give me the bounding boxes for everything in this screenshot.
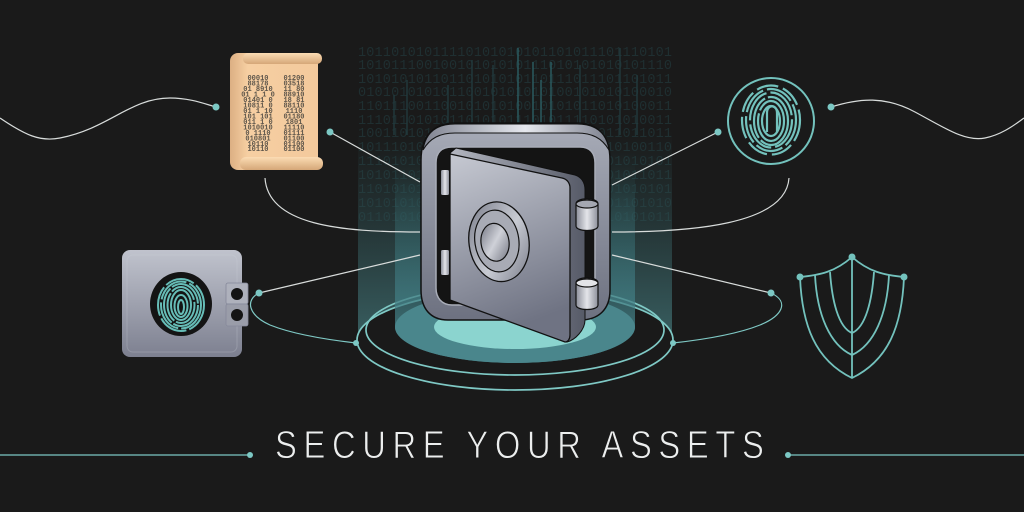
binary code backdrop: 01010101010110010101010100101010100010 xyxy=(358,86,672,101)
binary columns: 00010 xyxy=(247,75,269,83)
light beam xyxy=(358,130,672,345)
door side xyxy=(450,148,585,342)
hinge block xyxy=(226,283,248,304)
title rule right xyxy=(785,452,1024,458)
binary columns: 010801 xyxy=(245,136,271,144)
binary columns: 01100 xyxy=(283,141,305,149)
safe body xyxy=(421,123,610,320)
icon: fingerprint badge xyxy=(728,78,814,164)
bottom roll xyxy=(240,157,323,170)
binary columns: 1110 xyxy=(286,108,302,116)
binary code backdrop: 10101010110110101010110111011101101011 xyxy=(358,73,672,88)
box body xyxy=(122,250,242,357)
binary columns: 11 80 xyxy=(283,86,305,94)
binary code backdrop: 10101010101101010101010101010101101010 xyxy=(358,197,672,212)
binary code backdrop: 11101101010110101011101011110101010011 xyxy=(358,114,672,129)
binary code backdrop: 11011100110010101010010101011010100011 xyxy=(358,100,672,115)
icon: scroll with binary text xyxy=(230,53,323,170)
top roll xyxy=(243,53,322,64)
binary columns: 01180 xyxy=(283,114,305,122)
binary code backdrop xyxy=(358,46,672,226)
binary columns: 01200 xyxy=(283,75,305,83)
binary columns: 1010010 xyxy=(243,124,273,132)
binary columns: 03518 xyxy=(283,80,305,88)
binary columns: 01 8910 xyxy=(243,86,273,94)
binary columns: 0 1110 xyxy=(245,130,271,138)
dial xyxy=(464,198,534,286)
platform disc xyxy=(395,170,635,363)
connector nodes xyxy=(212,104,834,346)
binary columns: 10811 0 xyxy=(243,102,273,110)
left latches xyxy=(441,170,449,275)
connector lines xyxy=(0,98,1024,293)
binary code backdrop: 10101101010101010101010101010101011011 xyxy=(358,169,672,184)
binary columns: 01111 xyxy=(283,130,305,138)
binary code backdrop: 10101110010010101010111010101010101110 xyxy=(358,59,672,74)
title rule left xyxy=(0,452,253,458)
binary columns: 18 81 xyxy=(283,97,305,105)
binary columns: 10110 xyxy=(247,141,269,149)
binary columns: 88178 xyxy=(247,80,269,88)
vertical data streaks xyxy=(394,48,637,135)
right hinges xyxy=(576,199,598,310)
orbit connectors xyxy=(250,293,782,343)
binary code backdrop: 10011010101010101010101010101011011011 xyxy=(358,127,672,142)
binary columns: 01100 xyxy=(283,136,305,144)
binary columns: 101 101 xyxy=(243,114,273,122)
icon: open vault safe xyxy=(421,123,610,342)
binary columns: 1801 xyxy=(286,119,302,127)
binary columns xyxy=(241,75,305,154)
binary columns: 88110 xyxy=(283,102,305,110)
icon: shield outline xyxy=(796,254,908,378)
binary code backdrop: 10111010101010101010101010111010100110 xyxy=(358,141,672,156)
icon: biometric safe box xyxy=(122,250,248,357)
binary columns: 11110 xyxy=(283,124,305,132)
door face xyxy=(450,154,570,342)
binary columns: 01401 0 xyxy=(243,97,273,105)
fingerprint xyxy=(158,279,204,331)
title: SECURE YOUR ASSETS xyxy=(275,422,764,467)
top rim highlight xyxy=(423,124,609,150)
platform rings xyxy=(357,285,673,390)
binary columns: 01 1 1 0 xyxy=(241,92,275,100)
binary columns: 01 1 10 xyxy=(243,108,273,116)
safe opening xyxy=(436,147,595,305)
binary columns: 01100 xyxy=(283,146,305,154)
binary columns: 011 1 0 xyxy=(243,119,273,127)
binary code backdrop: 11010101101010101010101010110101010101 xyxy=(358,183,672,198)
parchment xyxy=(230,53,318,170)
binary code backdrop: 10110101011110101010101101011101110101 xyxy=(358,46,672,61)
binary columns: 10110 xyxy=(247,146,269,154)
binary code backdrop: 11101010101010101010101011010101010101 xyxy=(358,155,672,170)
binary code backdrop: 01101010101010101101010101011010101011 xyxy=(358,211,672,226)
binary columns: 88910 xyxy=(283,92,305,100)
scanner xyxy=(150,272,212,336)
